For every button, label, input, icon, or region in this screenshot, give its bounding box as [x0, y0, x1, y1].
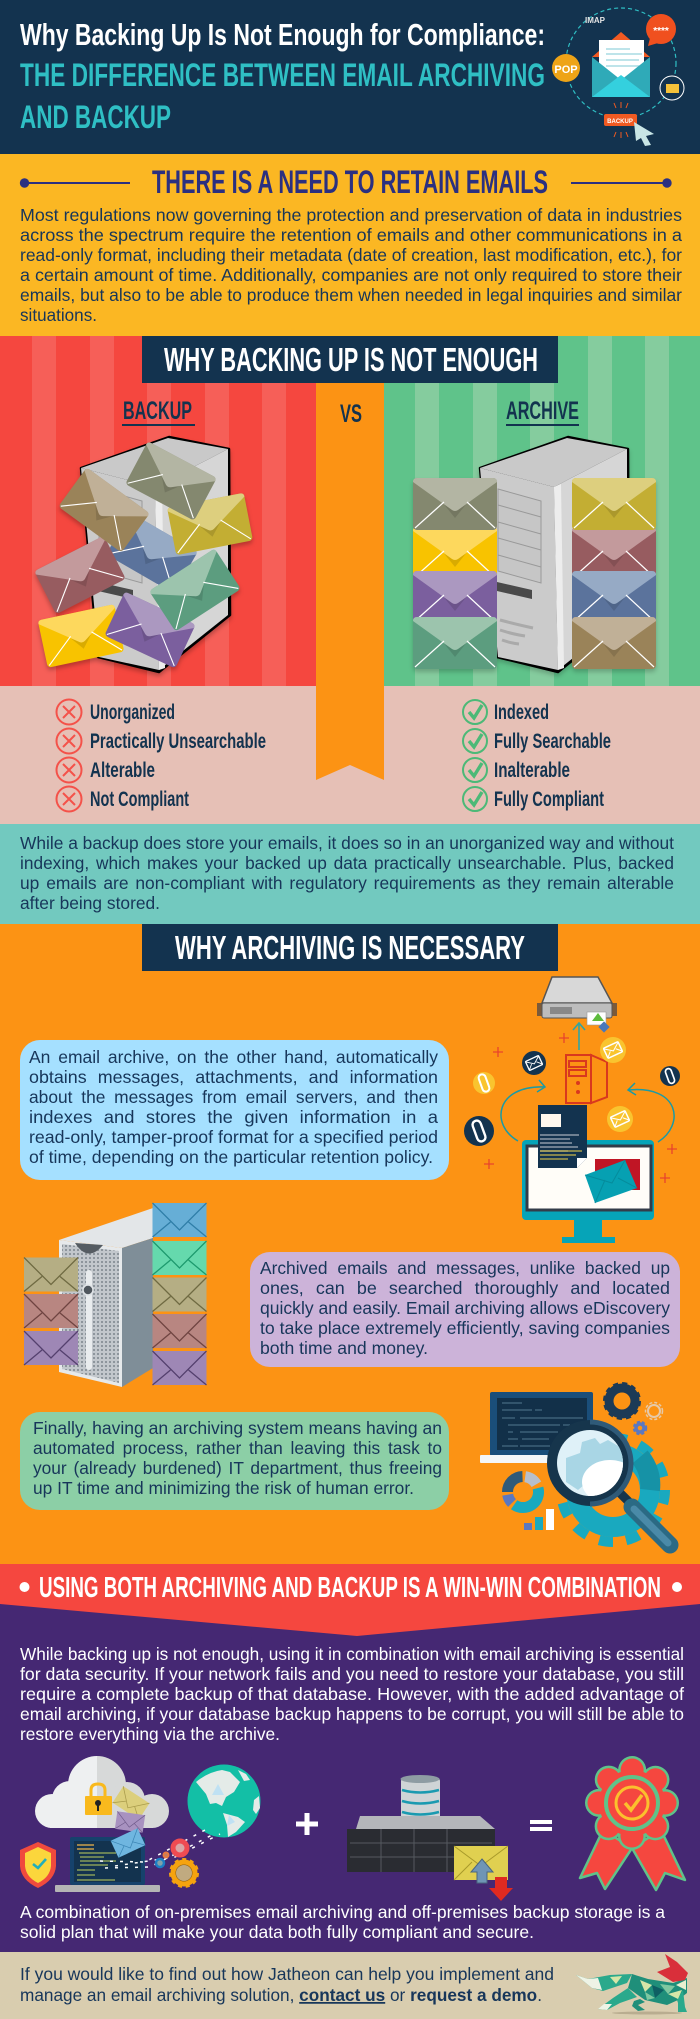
body text: emails, but also to be able to produce them when needed in legal inquiries and similar [20, 285, 682, 305]
icon: globe [188, 1764, 260, 1838]
icon: shield [20, 1842, 56, 1888]
vs ribbon [316, 383, 384, 780]
panel: call to action: If you would like to find out how Jatheon can help you implement and [20, 1964, 554, 1984]
list: archive positives: Inalterable [494, 759, 570, 782]
body text [20, 1644, 684, 1744]
illustration: server with ordered envelopes [413, 437, 656, 672]
banner [0, 1564, 700, 1636]
icon: email with orbit: **** [653, 26, 669, 37]
archive label: ARCHIVE [506, 397, 579, 425]
heading: WHY ARCHIVING IS NECESSARY [175, 929, 525, 966]
illustration: server with scattered envelopes [34, 437, 253, 672]
panel: win-win combination [0, 1564, 700, 1952]
list: archive positives: Fully Compliant [494, 788, 604, 811]
body text: While backing up is not enough, using it in combination with email archiving is essential [20, 1644, 684, 1664]
list: backup negatives: Unorganized [90, 701, 175, 724]
callout: green: up IT time and minimizing the risk of human error. [33, 1478, 414, 1498]
list: backup negatives: Not Compliant [90, 788, 189, 811]
body text: email archiving, if your database backup happens to be corrupt, you will still be able to [20, 1704, 684, 1724]
callout: purple [250, 1252, 680, 1367]
panel: backup column [0, 336, 316, 686]
heading: why backing up is not enough [142, 336, 558, 383]
callout: purple: quickly and easily. Email archiving allows eDiscovery [260, 1298, 670, 1318]
body text: situations. [20, 305, 97, 325]
icon: red tower [566, 1055, 607, 1103]
body text: for data security. If your network fails and you need to restore your database, you still [20, 1664, 684, 1684]
callout: purple: Archived emails and messages, unlike backed up [260, 1258, 670, 1278]
icon: server [537, 977, 617, 1033]
heading [142, 924, 558, 971]
illustration: cloud and network [20, 1756, 260, 1892]
panel: call to action: manage an email archiving solution, contact us or request a demo. [20, 1985, 542, 2005]
panel: backup explanation [0, 824, 700, 924]
body text: require a complete backup of that database. However, with the added advantage of [20, 1684, 684, 1704]
callout: blue [20, 1040, 449, 1180]
backup label [122, 397, 195, 426]
archive label [506, 397, 579, 426]
backup label: BACKUP [123, 397, 192, 425]
magnifier [547, 1420, 670, 1545]
body text [20, 205, 682, 325]
callout: green: Finally, having an archiving system means having an [33, 1418, 442, 1438]
icon: email with orbit: IMAP [585, 16, 606, 25]
callout: green: automated process, rather than leaving this task to [33, 1438, 442, 1458]
icon: email with orbit [552, 8, 684, 146]
body text: across the spectrum require the retention of emails and other communications in a [20, 225, 682, 245]
icon: padlock [85, 1784, 112, 1815]
panel: archive column [384, 336, 700, 686]
logo: fox [576, 1954, 688, 2014]
body text: restore everything via the archive. [20, 1724, 280, 1744]
closing text: solid plan that will make your data both fully compliant and secure. [20, 1922, 534, 1942]
list: archive positives: Fully Searchable [494, 730, 611, 753]
panel: why archiving is necessary [0, 924, 700, 1564]
callout: blue: about the messages from email servers, and then [29, 1087, 438, 1107]
gears: small [605, 1384, 662, 1434]
callout: blue: of time, depending on the particular retention policy. [29, 1147, 433, 1167]
laptop [480, 1392, 593, 1463]
list: backup negatives [56, 700, 266, 812]
gear: big [561, 1438, 665, 1542]
callout: purple: ones, can be searched thoroughly and located [260, 1278, 670, 1298]
illustration: storage server [347, 1775, 513, 1901]
plus sign [296, 1813, 318, 1835]
list: archive positives [463, 700, 611, 811]
panel: backup explanation: after being stored. [20, 893, 160, 913]
icon: gears [156, 1841, 198, 1886]
callout: green [20, 1412, 449, 1510]
icon: rosette [580, 1770, 685, 1890]
heading decoration left [20, 178, 130, 188]
callout: green: your (already burdened) IT department, thus freeing [33, 1458, 442, 1478]
icon: coins [464, 1037, 680, 1146]
illustration: laptop, magnifier and gears [480, 1384, 670, 1545]
illustration: archiving flow to server [464, 977, 680, 1243]
body text: read-only format, including their metadata (date of creation, last modification, etc.), for [20, 245, 682, 265]
callout: blue: obtains messages, attachments, and information [29, 1067, 438, 1087]
chart: donut [508, 1476, 539, 1508]
data dashes [100, 1830, 220, 1868]
callout: blue: read-only, tamper-proof format for a specified period [29, 1127, 438, 1147]
panel: need to retain emails [0, 154, 700, 336]
title line 3: AND BACKUP [20, 99, 171, 135]
panel: header [0, 0, 700, 154]
body text: a certain amount of time. Additionally, companies are not only required to store their [20, 265, 682, 285]
chart: bars [524, 1509, 554, 1530]
heading decoration right [571, 178, 672, 188]
icon: laptop [55, 1828, 160, 1892]
illustration: server with envelopes [24, 1203, 206, 1387]
list: backup negatives: Alterable [90, 759, 155, 782]
closing text [20, 1902, 665, 1942]
callout: blue: An email archive, on the other hand, automatically [29, 1047, 438, 1067]
icon: monitor [522, 1140, 654, 1243]
list: archive positives: Indexed [494, 701, 549, 724]
callout: purple: both time and money. [260, 1338, 428, 1358]
panel: backup explanation: While a backup does store your emails, it does so in an unorganized way and without [20, 833, 674, 853]
callout: blue: indexes and stores the given information in a [29, 1107, 438, 1127]
panel: backup explanation: up emails are non-compliant with regulatory requirements as they remain alterable [20, 873, 674, 893]
callout: purple: to take place extremely efficiently, saving companies [260, 1318, 670, 1338]
closing text: A combination of on-premises email archiving and off-premises backup storage is a [20, 1902, 665, 1922]
vs label: VS [340, 400, 362, 428]
panel: call to action [0, 1952, 700, 2019]
icon: email with orbit: BACKUP [607, 119, 633, 125]
icon: email with orbit: POP [554, 64, 578, 76]
panel: backup explanation: indexing, which makes your backed up data practically unsearchable. Plus, backed [20, 853, 674, 873]
body text: Most regulations now governing the protection and preservation of data in industries [20, 205, 682, 225]
panel: comparison lists [0, 686, 700, 824]
equals sign [530, 1820, 552, 1831]
list: backup negatives: Practically Unsearchable [90, 730, 266, 753]
icon: document [538, 1105, 587, 1168]
icon: cloud [35, 1756, 169, 1828]
